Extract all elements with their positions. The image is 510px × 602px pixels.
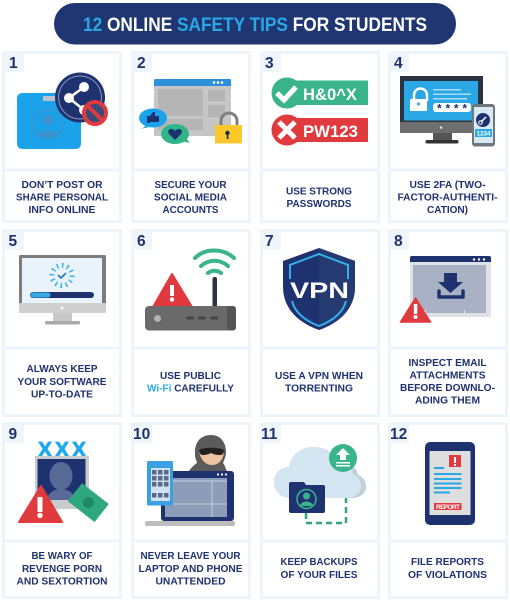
icon: monitor with software update xyxy=(19,255,106,324)
icon: folder with blocked share xyxy=(17,72,106,149)
panel: tip 4 xyxy=(389,52,507,222)
panel: tip 6: 6 xyxy=(137,233,146,250)
caption: SECURE YOUR xyxy=(154,179,227,191)
icon: phone with report: REPORT xyxy=(436,504,460,511)
caption: ALWAYS KEEP xyxy=(26,363,98,375)
caption: USE 2FA (TWO- xyxy=(410,179,486,191)
caption: ATTACHMENTS xyxy=(410,370,486,382)
icon: router with warning and wifi xyxy=(145,250,236,330)
panel: tip 12: 12 xyxy=(390,426,407,443)
caption: UP-TO-DATE xyxy=(31,388,93,400)
panel: tip 5 xyxy=(3,230,121,416)
panel: tip 4: 4 xyxy=(394,55,403,72)
panel: tip 11: 11 xyxy=(261,426,278,443)
caption xyxy=(154,179,227,216)
caption: DON’T POST OR xyxy=(22,179,103,191)
panel: tip 5: 5 xyxy=(8,233,18,250)
caption: NEVER LEAVE YOUR xyxy=(140,550,241,562)
icon: monitor and phone two-factor xyxy=(400,76,495,146)
panel: tip 3: 3 xyxy=(265,55,274,72)
panel: tip 1: 1 xyxy=(9,55,18,72)
caption xyxy=(138,550,242,588)
caption: INSPECT EMAIL xyxy=(408,357,487,369)
panel: tip 2 xyxy=(132,52,250,222)
panel: tip 3 xyxy=(261,52,379,222)
icon: strong password badge xyxy=(272,78,368,108)
caption xyxy=(408,556,487,581)
panel: tip 10 xyxy=(132,424,250,598)
icon: XXX monitor with warning and money: XXX xyxy=(38,438,86,462)
caption: INFO ONLINE xyxy=(28,204,96,216)
title banner: 12 ONLINE SAFETY TIPS FOR STUDENTS xyxy=(83,14,427,36)
caption: TORRENTING xyxy=(285,382,353,394)
icon: VPN shield xyxy=(283,248,355,330)
caption: OF VIOLATIONS xyxy=(408,569,487,581)
icon: XXX monitor with warning and money xyxy=(19,438,109,522)
caption: YOUR SOFTWARE xyxy=(18,376,106,388)
icon: weak password badge: PW123 xyxy=(303,122,358,141)
caption: BEFORE DOWNLO- xyxy=(400,382,495,394)
caption xyxy=(147,370,234,394)
caption: UNATTENDED xyxy=(156,576,226,588)
caption: ADING THEM xyxy=(415,394,480,406)
caption: REVENGE PORN xyxy=(22,563,102,575)
panel: tip 9 xyxy=(3,424,121,598)
caption xyxy=(16,179,109,216)
caption: AND SEXTORTION xyxy=(16,576,108,588)
panel: tip 12 xyxy=(389,424,507,598)
caption: USE STRONG xyxy=(286,186,352,198)
caption: USE A VPN WHEN xyxy=(275,370,363,382)
caption: KEEP BACKUPS xyxy=(280,556,358,568)
title banner xyxy=(54,3,456,44)
caption: SOCIAL MEDIA xyxy=(154,192,227,204)
icon: download window with warning xyxy=(400,256,491,322)
icon: VPN shield: VPN xyxy=(290,278,349,303)
panel: tip 7: 7 xyxy=(265,233,274,250)
caption: FACTOR-AUTHENTI- xyxy=(398,192,498,204)
caption: Wi-Fi CAREFULLY xyxy=(147,382,234,394)
icon: phone with report xyxy=(425,442,475,525)
caption: SHARE PERSONAL xyxy=(16,192,109,204)
icon: cloud backup xyxy=(274,444,366,523)
panel: tip 8 xyxy=(389,230,507,416)
caption xyxy=(275,370,363,394)
caption xyxy=(286,186,352,210)
caption xyxy=(16,550,108,588)
panel: tip 2: 2 xyxy=(137,55,146,72)
caption: BE WARY OF xyxy=(32,550,93,562)
panel: tip 6 xyxy=(132,230,250,416)
panel: tip 11 xyxy=(261,424,379,598)
caption xyxy=(400,357,495,406)
caption xyxy=(18,363,106,400)
caption: PASSWORDS xyxy=(286,198,352,210)
panel: tip 7 xyxy=(261,230,379,416)
panel: tip 1 xyxy=(3,52,121,222)
icon: monitor and phone two-factor: 1234 xyxy=(476,130,491,138)
icon: monitor and phone two-factor: **** xyxy=(437,102,467,116)
caption: USE PUBLIC xyxy=(160,370,221,382)
panel: tip 8: 8 xyxy=(394,233,403,250)
icon: hacker with laptop and tablet xyxy=(145,435,235,526)
panel: tip 9: 9 xyxy=(8,426,18,443)
caption: LAPTOP AND PHONE xyxy=(138,563,242,575)
caption xyxy=(280,556,358,581)
caption: OF YOUR FILES xyxy=(280,569,358,581)
caption: FILE REPORTS xyxy=(411,556,484,568)
panel: tip 10: 10 xyxy=(133,426,150,443)
icon: strong password badge: H&0^X xyxy=(303,85,358,104)
caption: CATION) xyxy=(427,204,468,216)
caption xyxy=(398,179,498,216)
caption: ACCOUNTS xyxy=(162,204,218,216)
icon: weak password badge xyxy=(272,114,368,146)
icon: social media window with lock xyxy=(139,79,242,144)
